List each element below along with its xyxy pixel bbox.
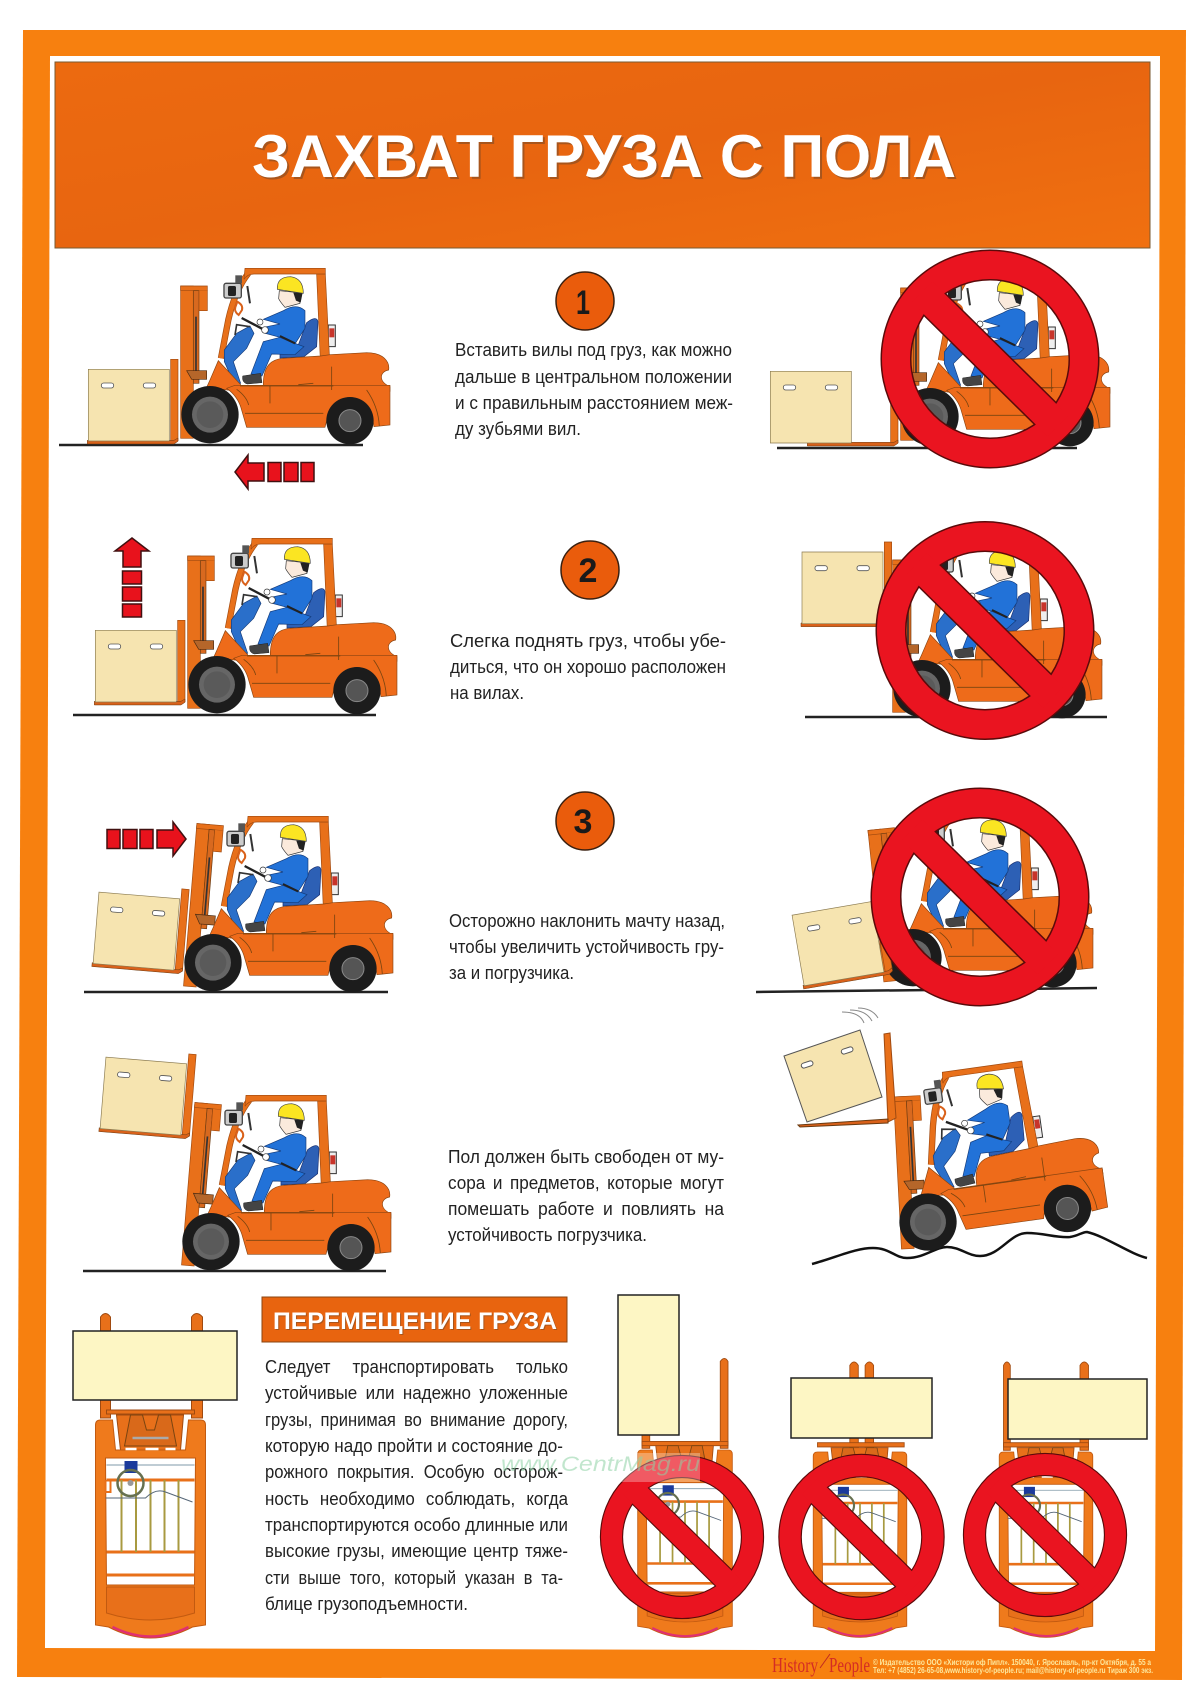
text: step 1: ду зубьями вил. [455, 418, 581, 439]
number badge 1: 1 [576, 284, 590, 322]
number badge 2: 2 [579, 552, 597, 590]
title banner [55, 62, 1150, 248]
number badge 1 [556, 272, 614, 330]
text: floor clear: сора и предметов, которые могут [448, 1172, 724, 1193]
text: floor clear: помешать работе и повлиять на [448, 1198, 725, 1219]
forklift: floor clear [83, 1047, 391, 1271]
text: transporting loads: высокие грузы, имеющие центр тяже- [265, 1540, 568, 1561]
text: floor clear: устойчивость погрузчика. [448, 1224, 647, 1245]
section heading [262, 1297, 567, 1342]
text: transporting loads: Следует транспортировать только [265, 1356, 568, 1377]
text: floor clear: Пол должен быть свободен от му- [448, 1146, 724, 1167]
number badge 2 [561, 541, 619, 599]
number badge 3: 3 [574, 803, 592, 841]
top view: correct load [73, 1314, 237, 1638]
text: step 2 [450, 630, 726, 703]
text: floor clear [448, 1146, 725, 1245]
text: step 3: за и погрузчика. [449, 962, 574, 983]
top view: off-centre load, wrong [999, 1362, 1147, 1637]
prohibition sign 1 [896, 265, 1084, 453]
arrow: left [235, 455, 314, 489]
text: step 2: Слегка поднять груз, чтобы убе- [450, 630, 726, 651]
text: transporting loads: транспортируются особо длинные или [265, 1514, 568, 1535]
text: step 1: Вставить вилы под груз, как можно [455, 339, 732, 360]
text: transporting loads: ность необходимо соблюдать, когда [265, 1488, 569, 1509]
title: ЗАХВАТ ГРУЗА С ПОЛА [252, 123, 956, 190]
publisher logo [772, 1653, 870, 1677]
text: step 1: и с правильным расстоянием меж- [455, 392, 733, 413]
prohibition sign: narrow forks [790, 1466, 933, 1608]
text: transporting loads [265, 1356, 569, 1614]
forklift step 3: wrong [756, 811, 1097, 992]
text: transporting loads: устойчивые или надежно уложенные [265, 1382, 568, 1403]
forklift step 1: correct [59, 268, 390, 445]
number badge 3 [556, 792, 614, 850]
text: step 3 [449, 910, 725, 983]
text: transporting loads: блице грузоподъемности. [265, 1593, 468, 1614]
forklift step 2: correct [73, 538, 397, 715]
arrow: up [115, 538, 149, 617]
text: transporting loads: грузы, принимая во внимание дорогу, [265, 1409, 568, 1430]
text: transporting loads: рожного покрытия. Особую осторож- [265, 1461, 563, 1482]
prohibition sign: off-centre load [974, 1464, 1116, 1606]
watermark: www.CentrMag.ru [501, 1453, 700, 1476]
forklift step 3: correct [84, 816, 393, 992]
text: step 2: на вилах. [450, 682, 524, 703]
text: step 1 [455, 339, 733, 439]
arrow: right [107, 822, 186, 856]
prohibition sign 2 [891, 536, 1079, 724]
text: step 3: чтобы увеличить устойчивость гру- [449, 936, 724, 957]
top view: tall load, wrong [618, 1295, 732, 1637]
text: step 3: Осторожно наклонить мачту назад, [449, 910, 725, 931]
text: transporting loads: сти выше того, который указан в та- [265, 1567, 563, 1588]
text: transporting loads: которую надо пройти и состояние до- [265, 1435, 563, 1456]
forklift on uneven ground with tipping load [784, 1008, 1147, 1264]
text: step 1: дальше в центральном положении [455, 366, 732, 387]
forklift step 1: wrong [770, 270, 1110, 448]
text: step 2: диться, что он хорошо расположен [450, 656, 726, 677]
forklift step 2: wrong [801, 542, 1107, 718]
prohibition sign 3 [886, 803, 1074, 991]
watermark [501, 1453, 700, 1482]
section heading: ПЕРЕМЕЩЕНИЕ ГРУЗА [273, 1308, 557, 1335]
prohibition sign: tall load [612, 1466, 752, 1608]
publisher imprint [873, 1658, 1153, 1675]
publisher logo: People [829, 1653, 870, 1677]
publisher logo: History [772, 1653, 818, 1677]
top view: narrow fork spacing, wrong [791, 1362, 932, 1637]
